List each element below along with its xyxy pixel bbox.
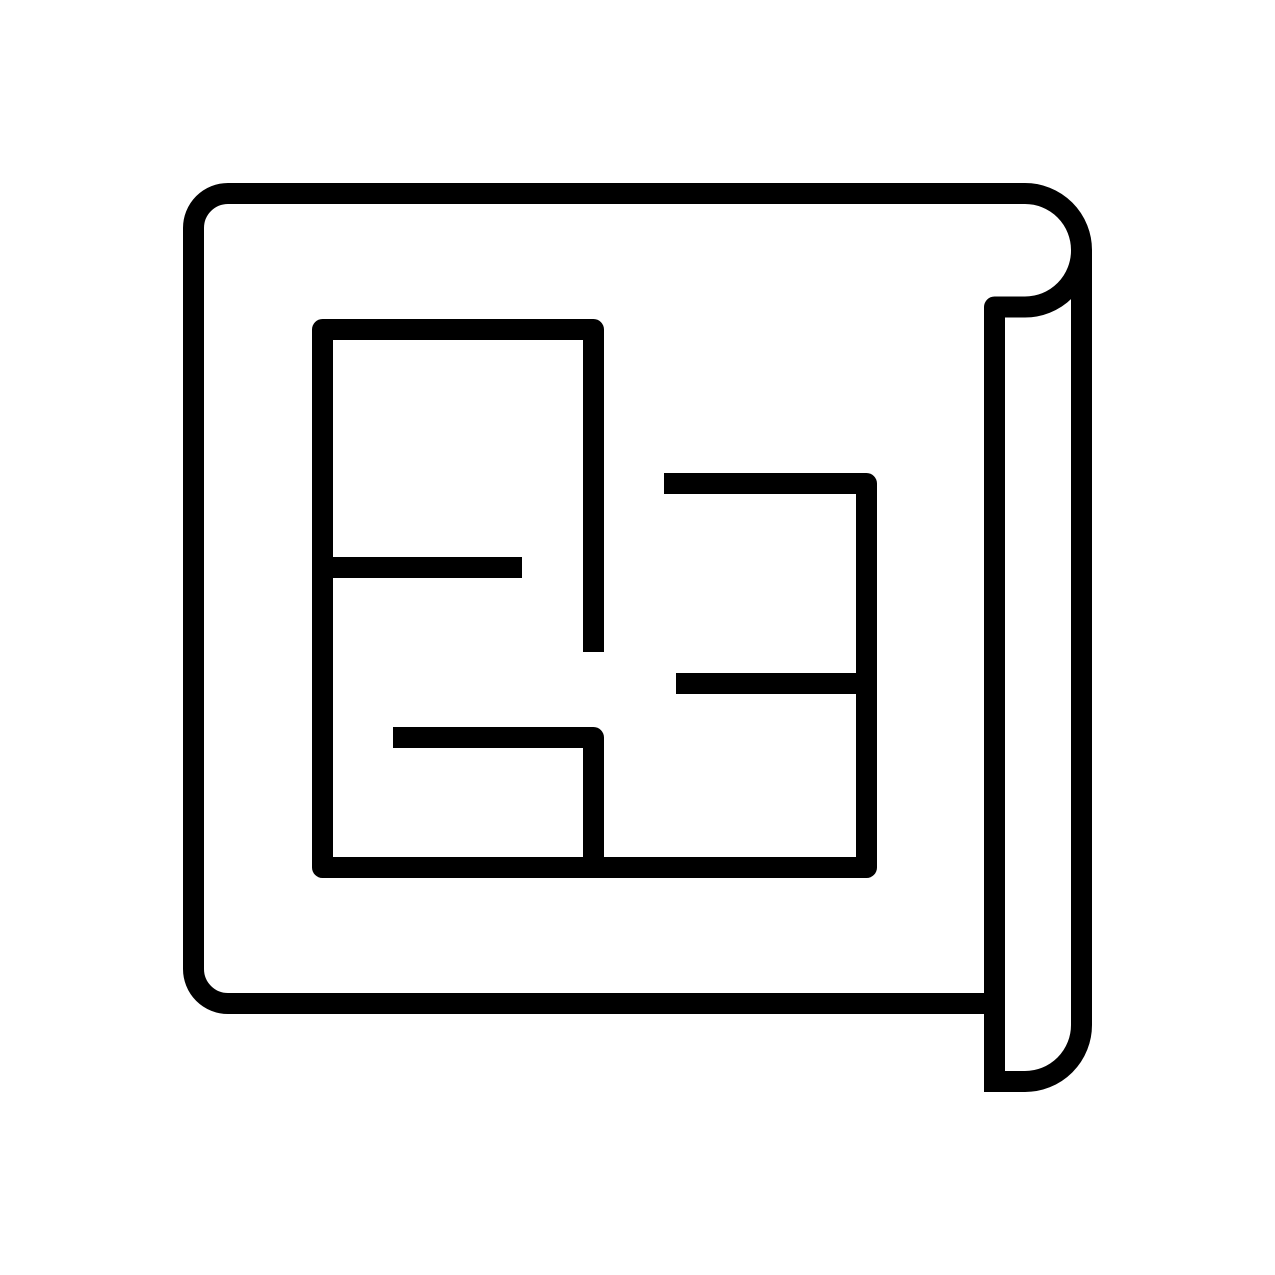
lower interior wall bbox=[393, 738, 594, 868]
blueprint sheet outline with rolled right edge bbox=[194, 194, 1082, 1082]
upper left interior wall bbox=[333, 557, 522, 578]
left room outline and main walls bbox=[322, 330, 866, 868]
floor plan walls bbox=[322, 330, 866, 868]
right interior wall bbox=[676, 673, 856, 694]
